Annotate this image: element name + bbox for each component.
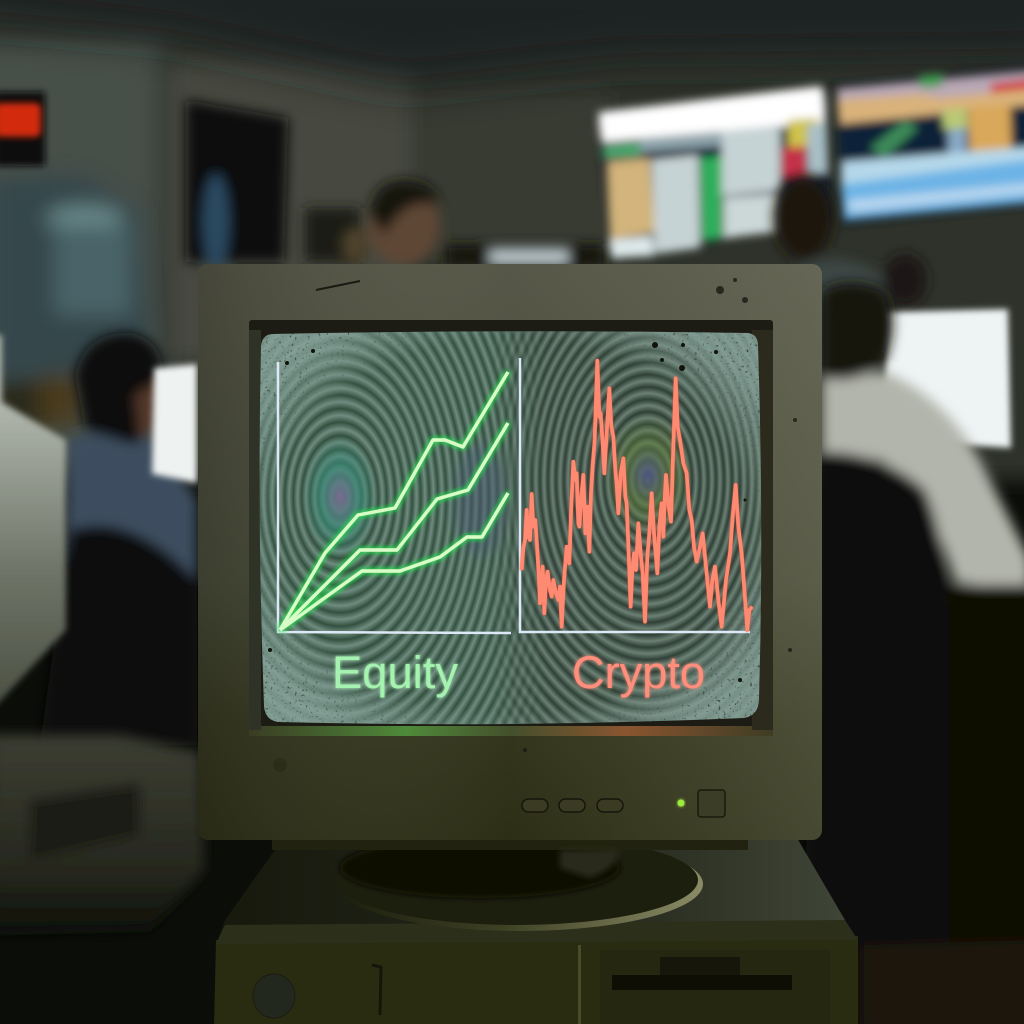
computer case under monitor	[214, 826, 858, 1024]
power LED	[678, 800, 684, 806]
front buttons	[522, 799, 623, 812]
white monitor at left	[152, 364, 197, 483]
wall screen one	[597, 86, 830, 260]
moire pattern	[260, 331, 534, 724]
background person by screens	[774, 176, 927, 306]
power switch	[698, 790, 725, 817]
equity lines	[280, 372, 508, 630]
left foreground computer	[0, 335, 66, 712]
crypto line	[522, 361, 752, 630]
label: Crypto: Crypto	[572, 647, 705, 698]
white monitor at right	[884, 309, 1011, 448]
wall screen two	[836, 66, 1024, 224]
monitor bezel	[198, 264, 822, 840]
right chart axes	[520, 358, 750, 632]
glass partition	[0, 175, 150, 430]
CRT monitor	[198, 264, 822, 840]
right seated person	[800, 282, 1024, 1024]
red LED sign	[0, 92, 45, 166]
dirt patch	[268, 342, 746, 682]
dust on bezel	[316, 281, 360, 290]
label: Equity: Equity	[332, 647, 458, 698]
monitor stand	[272, 835, 748, 931]
background person head	[341, 180, 605, 268]
floppy drive	[600, 950, 830, 1024]
left seated person	[40, 333, 197, 745]
power button	[253, 974, 295, 1018]
left chart axes	[278, 362, 511, 633]
CRT screen	[255, 325, 770, 730]
wall and ceiling	[0, 0, 1024, 480]
dark doorway with blue reflection	[186, 100, 360, 270]
ceiling shadow	[0, 0, 1024, 85]
left desk box	[0, 735, 204, 935]
